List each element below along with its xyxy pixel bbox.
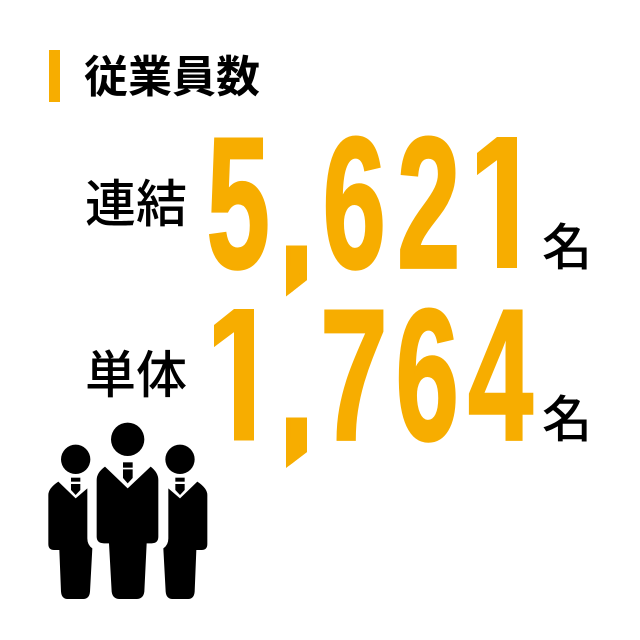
unit: non-consolidated: 名 <box>542 392 592 448</box>
icon: left person <box>48 445 92 599</box>
number: consolidated 5,621: 1 <box>469 98 538 308</box>
icon: three business people <box>48 423 207 599</box>
label: non-consolidated: 単体 <box>85 347 187 404</box>
number: non-consolidated 1,764 <box>214 308 534 468</box>
label: consolidated: 連結 <box>85 176 187 233</box>
number: consolidated 5,621: 5 <box>206 98 270 307</box>
icon: center person <box>97 423 158 599</box>
icon: right person <box>163 445 207 599</box>
number: consolidated 5,621: 6 <box>322 98 386 307</box>
unit: consolidated: 名 <box>542 220 592 276</box>
number: non-consolidated 1,764: 1 <box>206 270 275 480</box>
number: non-consolidated 1,764: 7 <box>320 271 388 480</box>
number: non-consolidated 1,764: , <box>279 278 321 479</box>
heading accent bar <box>49 50 60 102</box>
number: consolidated 5,621: , <box>279 106 321 307</box>
number: consolidated 5,621 <box>209 136 517 296</box>
title: 従業員数 <box>84 53 260 102</box>
number: non-consolidated 1,764: 6 <box>396 270 459 479</box>
number: non-consolidated 1,764: 4 <box>468 272 533 480</box>
number: consolidated 5,621: 2 <box>397 98 460 307</box>
